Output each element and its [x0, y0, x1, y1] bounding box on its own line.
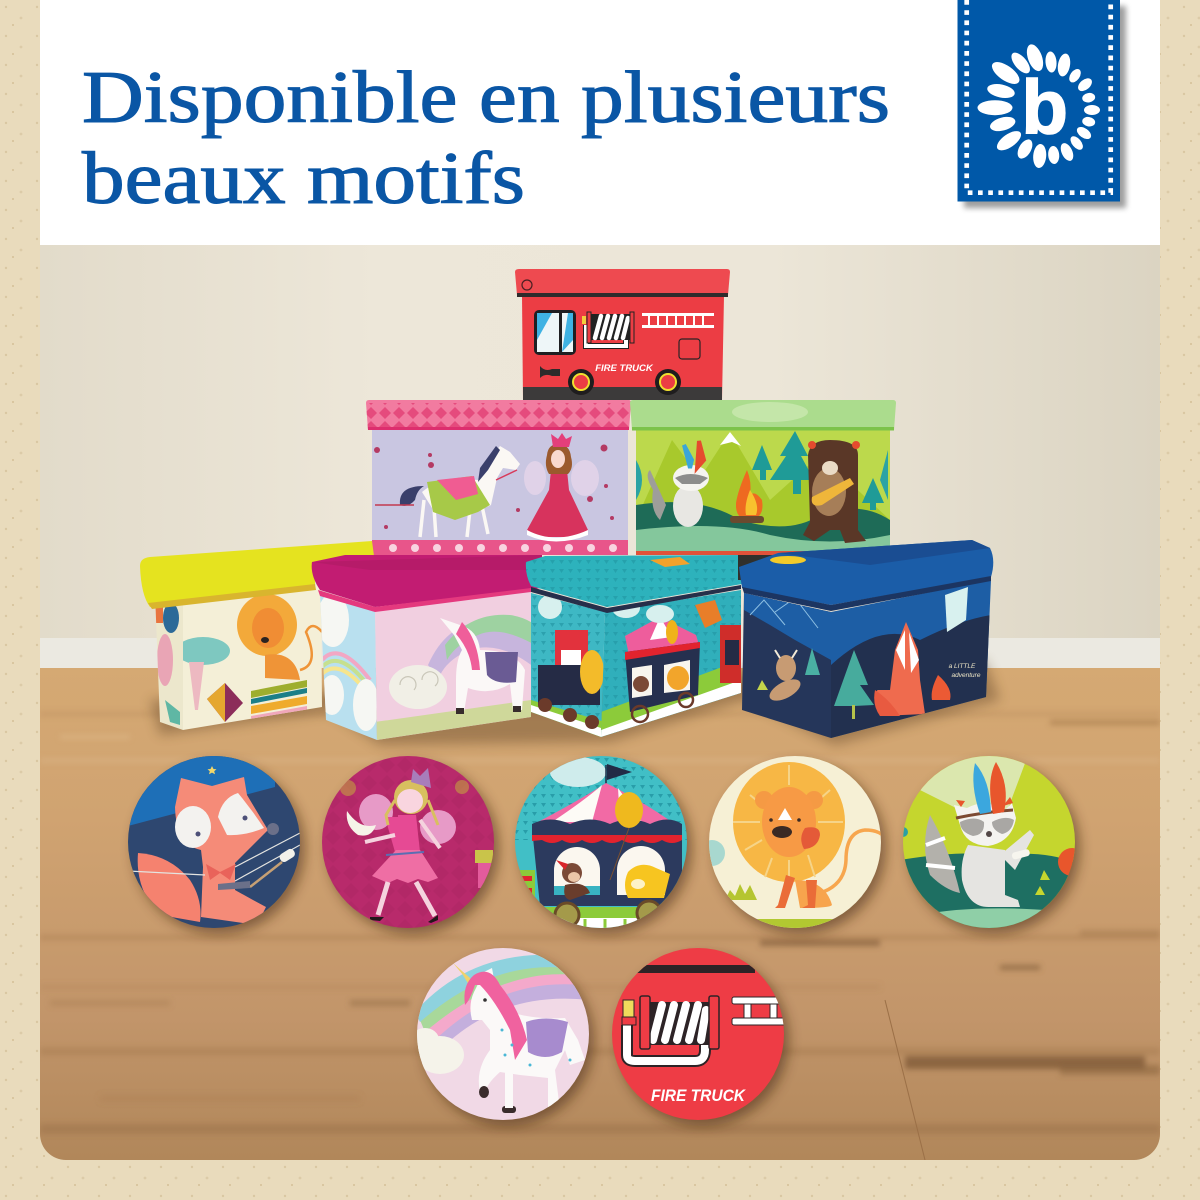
princess	[524, 433, 599, 542]
wagon windows	[554, 846, 670, 900]
hose reel	[622, 996, 719, 1061]
ladder	[642, 313, 714, 328]
horse	[375, 446, 520, 537]
box: blue fox night	[738, 540, 993, 745]
disc: circus wagon	[510, 750, 692, 935]
disc: fox	[120, 750, 305, 935]
tail	[925, 815, 960, 893]
box: fire truck	[515, 269, 730, 400]
body	[962, 845, 1020, 907]
unicorn	[440, 618, 525, 714]
logo badge	[958, 0, 1126, 208]
pattern discs row one	[120, 750, 1086, 940]
disc: princess	[320, 750, 500, 935]
lion	[176, 594, 322, 722]
box: forest raccoon and bear	[630, 400, 896, 560]
box: blue fox night: adventure	[952, 672, 981, 679]
pine tree	[834, 650, 874, 706]
photo panel	[40, 245, 1160, 1168]
window	[534, 310, 576, 355]
box: teal circus train	[526, 555, 742, 743]
disc: raccoon	[898, 750, 1086, 940]
header panel	[40, 0, 1160, 245]
title: beaux motifs	[82, 138, 525, 220]
pattern discs row two	[410, 945, 792, 1126]
deer	[770, 650, 800, 701]
cloud	[416, 1036, 464, 1074]
campfire	[730, 470, 764, 523]
icon: flower petals	[978, 42, 1100, 169]
pine tree	[770, 431, 814, 494]
disc: lion	[699, 750, 886, 935]
baseboard	[40, 638, 1160, 668]
feathers	[973, 763, 991, 814]
raccoon	[648, 441, 709, 527]
box shadows	[150, 660, 1000, 745]
title	[82, 57, 890, 220]
bear	[803, 440, 866, 543]
box label: FIRE TRUCK	[595, 363, 654, 374]
logo letter: b	[1022, 65, 1068, 150]
disc: unicorn	[410, 945, 600, 1126]
campfire	[932, 675, 950, 700]
wheels	[568, 369, 681, 395]
box: blue fox night: a LITTLE	[949, 663, 976, 670]
wooden floor	[40, 668, 1160, 1168]
ladder	[732, 997, 792, 1025]
box: yellow lid lion	[140, 541, 374, 730]
circus wagon	[625, 617, 700, 722]
disc: fire truck	[610, 945, 792, 1126]
title: Disponible en plusieurs	[82, 57, 890, 139]
box: princess and horse	[366, 400, 631, 555]
box: pink lid unicorn	[312, 555, 542, 740]
fox	[874, 622, 925, 716]
unicorn body	[470, 968, 585, 1110]
hose	[582, 312, 634, 346]
disc label: FIRE TRUCK	[651, 1087, 746, 1105]
head	[954, 803, 1016, 846]
wall	[40, 245, 1160, 670]
